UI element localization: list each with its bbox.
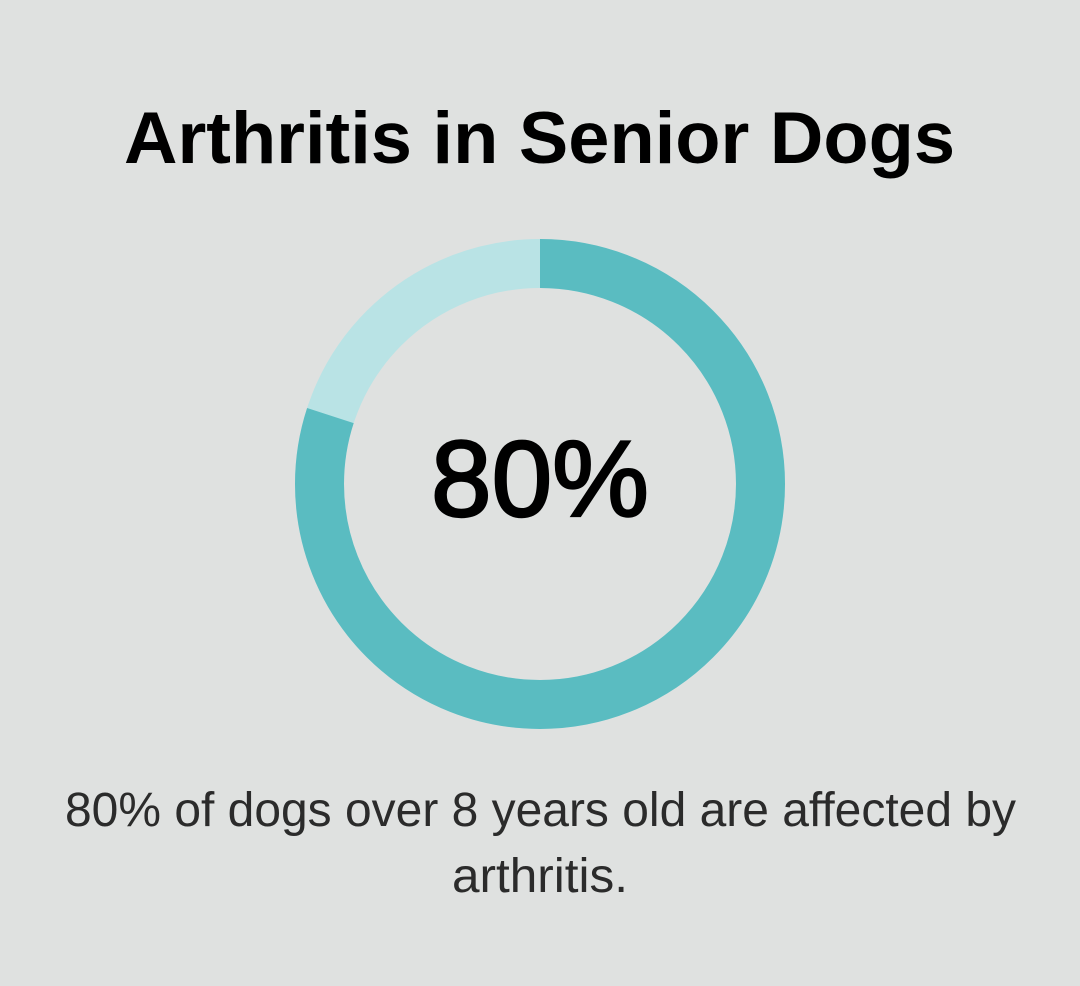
center value: 80% [431,418,649,539]
title: Arthritis in Senior Dogs [124,98,955,179]
caption [65,784,1016,903]
caption line 2: arthritis. [452,850,628,903]
donut chart: 80 percent [320,264,760,704]
80 percent arc [320,264,760,704]
caption line 1: 80% of dogs over 8 years old are affected by [65,784,1016,837]
remaining 20 percent track [320,264,760,704]
